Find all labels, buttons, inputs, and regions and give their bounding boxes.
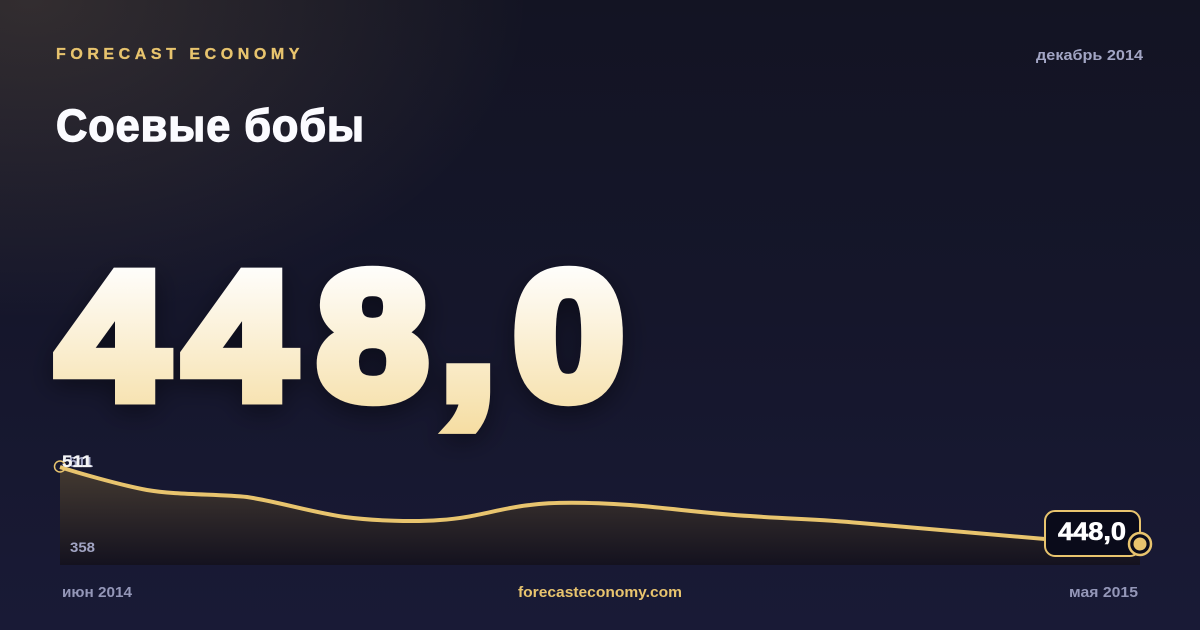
sparkline chart [54, 452, 1151, 565]
big value: 4 [184, 236, 294, 437]
end date: мая 2015 [1069, 584, 1138, 601]
big value: , [439, 227, 497, 439]
value pill [1045, 511, 1140, 556]
chart line [60, 467, 1140, 544]
big value: 4 [57, 236, 167, 437]
min label: 358 [70, 539, 95, 555]
end marker [1129, 533, 1151, 555]
start marker [54, 461, 66, 472]
source url: forecasteconomy.com [518, 584, 682, 601]
title: Соевые бобы [56, 100, 365, 151]
big value: 8 [318, 236, 428, 437]
big value: 0 [514, 236, 624, 437]
max label: 511 [62, 452, 92, 471]
date label: декабрь 2014 [1036, 47, 1144, 64]
brand label: FORECAST ECONOMY [56, 46, 304, 63]
max label shadow: 511 [69, 454, 93, 471]
pill value: 448,0 [1058, 518, 1126, 546]
start date: июн 2014 [62, 584, 133, 601]
chart area [60, 467, 1140, 565]
